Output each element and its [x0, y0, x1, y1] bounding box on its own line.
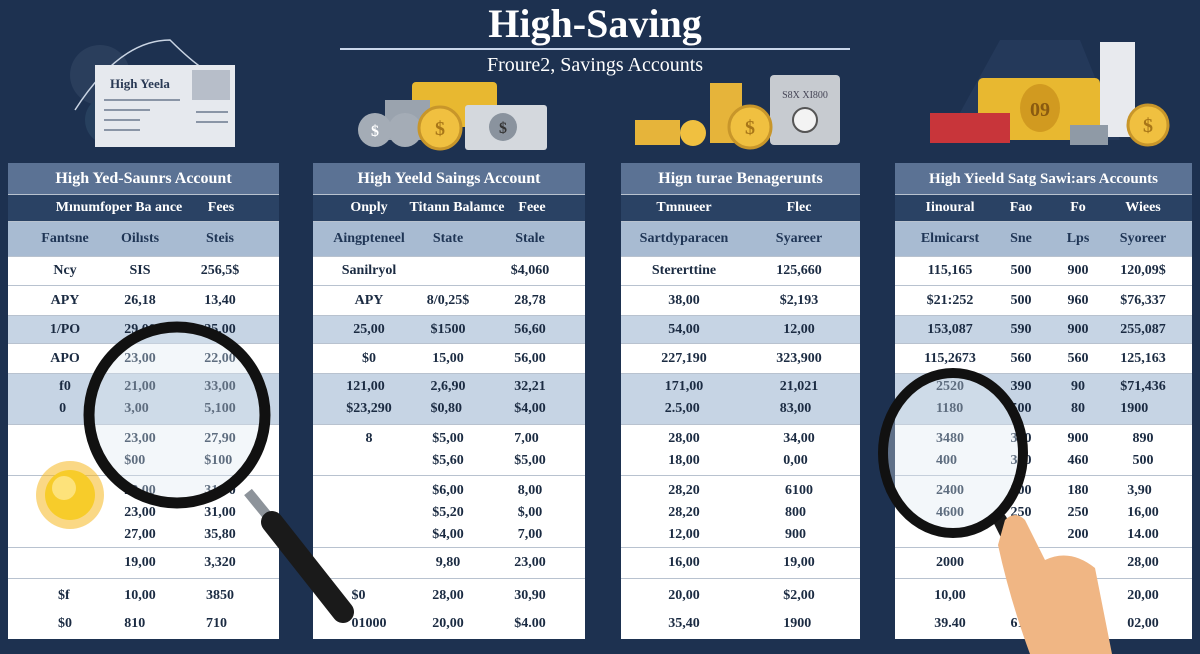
- panel: table 4: 80: [1071, 401, 1085, 416]
- panel: table 3: $2,00: [783, 588, 815, 603]
- panel: table 2: 7,00: [514, 431, 539, 446]
- panel: table 1: Fees: [208, 200, 234, 215]
- panel: table 3: 1900: [783, 616, 811, 631]
- panel: table 4: 2520: [936, 379, 964, 394]
- panel: table 4: 960: [1068, 293, 1088, 308]
- icon: gold bill and document: $: [1143, 115, 1153, 137]
- panel: table 2: $0,80: [430, 401, 462, 416]
- icon: newspaper: High Yeela: [110, 76, 170, 91]
- panel: table 2: $4,00: [514, 401, 546, 416]
- panel: table 4: 500: [1010, 263, 1032, 278]
- panel: table 3: 28,00: [668, 431, 700, 446]
- panel: table 2: $,00: [518, 505, 542, 520]
- panel: table 4: 250: [1010, 505, 1032, 520]
- panel: table 2: $0: [352, 588, 366, 603]
- panel: table 2: 56,00: [514, 351, 546, 366]
- panel: table 4: $71,436: [1120, 379, 1166, 394]
- panel: table 4: [895, 163, 1192, 639]
- panel: table 2: Titann Balamce: [409, 200, 505, 215]
- panel: table 3: 28,20: [668, 505, 700, 520]
- panel: table 2: [313, 163, 585, 639]
- panel: table 1: $00: [124, 453, 145, 468]
- panel: table 3: 2.5,00: [665, 401, 700, 416]
- panel: table 2: 2,6,90: [430, 379, 466, 394]
- panel: table 2: APY: [355, 293, 383, 308]
- title: [340, 1, 850, 76]
- panel: table 1: APY: [51, 293, 79, 308]
- panel: table 3: 83,00: [780, 401, 811, 416]
- icon: coin stacks and safe: [635, 75, 840, 148]
- panel: table 2: 30,90: [514, 588, 546, 603]
- panel: table 1: 29,00: [124, 322, 156, 337]
- panel: table 1: 0: [59, 401, 66, 416]
- hand: [998, 515, 1112, 654]
- panel: table 4: Lps: [1067, 231, 1089, 246]
- panel: table 2: State: [433, 231, 463, 246]
- panel: table 1: 3,00: [124, 401, 149, 416]
- panel: table 4: 200: [1068, 527, 1088, 542]
- panel: table 4: 390: [1010, 379, 1032, 394]
- panel: table 1: [8, 163, 279, 639]
- panel: table 2: 121,00: [346, 379, 385, 394]
- panel: table 2: 25,00: [353, 322, 385, 337]
- panel: table 2: $0: [362, 351, 376, 366]
- panel: table 1: Fantsne: [41, 231, 89, 246]
- panel: table 2: Sanilryol: [342, 263, 396, 278]
- panel: table 4: 28,00: [1127, 555, 1159, 570]
- panel: table 4: 400: [936, 453, 957, 468]
- panel: table 4: Iinoural: [925, 200, 975, 215]
- panel: table 4: 153,087: [927, 322, 973, 337]
- panel: table 4: 10,00: [934, 588, 966, 603]
- panel: table 1: 22,00: [204, 351, 236, 366]
- panel: table 4: $21:252: [927, 293, 973, 308]
- heading: High-Saving: [488, 1, 702, 46]
- panel: table 4: 900: [1068, 263, 1088, 278]
- panel: table 1: 27,90: [204, 431, 236, 446]
- panel: table 3: 21,021: [780, 379, 818, 394]
- panel: table 3: 323,900: [776, 351, 822, 366]
- panel: table 1: 27,00: [124, 527, 156, 542]
- panel: table 3: Stererttine: [652, 263, 716, 278]
- panel: table 2: $5,20: [432, 505, 464, 520]
- panel: table 2: $4,00: [432, 527, 464, 542]
- panel: table 3: 34,00: [783, 431, 815, 446]
- panel: table 2: 8,00: [518, 483, 542, 498]
- table 4 title: [895, 163, 1192, 195]
- panel: table 2: $23,290: [346, 401, 392, 416]
- panel: table 4: 300: [1010, 483, 1032, 498]
- panel: table 3: 0,00: [783, 453, 808, 468]
- panel: table 1: 23,00: [124, 431, 156, 446]
- panel: table 4: 460: [1068, 453, 1088, 468]
- panel: table 4: 590: [1010, 322, 1032, 337]
- panel: table 1: 1/PO: [50, 322, 80, 337]
- icon: newspaper: [70, 40, 235, 147]
- panel: table 4: Syoreer: [1120, 231, 1166, 246]
- panel: table 4: 3480: [936, 431, 964, 446]
- table 1 title: High Yed-Saunrs Account: [55, 170, 232, 187]
- panel: table 3: $2,193: [780, 293, 818, 308]
- panel: table 4: 125,163: [1120, 351, 1166, 366]
- panel: table 3: 125,660: [776, 263, 822, 278]
- panel: table 2: $1500: [430, 322, 466, 337]
- panel: table 3: 171,00: [665, 379, 703, 394]
- panel: table 3: 800: [785, 505, 806, 520]
- panel: table 2: $4,060: [511, 263, 549, 278]
- panel: table 4: 1180: [936, 401, 963, 416]
- panel: table 1: Mınumfoper Ba ance: [56, 200, 182, 215]
- panel: table 4: 20,00: [1127, 588, 1159, 603]
- panel: table 4: 120,09$: [1120, 263, 1166, 278]
- panel: table 1: 31,00: [204, 505, 236, 520]
- panel: table 2: $5,00: [514, 453, 546, 468]
- panel: table 4: 500: [1010, 293, 1032, 308]
- panel: table 3: 227,190: [661, 351, 707, 366]
- panel: table 1: $f: [58, 588, 70, 603]
- panel: table 2: Aingpteneel: [333, 231, 405, 246]
- panel: table 4: 500: [1132, 453, 1154, 468]
- panel: table 4: Sne: [1010, 231, 1032, 246]
- icon: sun: [36, 461, 104, 529]
- panel: table 3: Tmnueer: [656, 200, 712, 215]
- icon: coin stacks and safe: S8X XI800: [782, 90, 828, 101]
- panel: table 1: 710: [206, 616, 227, 631]
- panel: table 4: 1900: [1120, 401, 1148, 416]
- panel: table 2: 9,80: [436, 555, 460, 570]
- icon: magnifier right with hand: [883, 373, 1112, 654]
- panel: table 2: 32,21: [514, 379, 546, 394]
- panel: table 3: 28,20: [668, 483, 700, 498]
- panel: table 3: Sartdyparacen: [640, 231, 728, 246]
- panel: table 1: SIS: [129, 263, 151, 278]
- panel: table 1: 23,00: [124, 483, 156, 498]
- panel: table 3: 16,00: [668, 555, 700, 570]
- panel: table 4: 02,00: [1127, 616, 1159, 631]
- panel: table 1: 13,40: [204, 293, 236, 308]
- panel: table 1: 31,00: [204, 483, 236, 498]
- table 2 title: High Yeeld Saings Account: [358, 170, 540, 187]
- panel: table 4: 90: [1071, 379, 1085, 394]
- panel: table 1: $100: [204, 453, 232, 468]
- icons row: [70, 39, 1170, 150]
- icon: coin stacks and safe: $: [745, 117, 755, 139]
- icon: cash and coins: $: [499, 120, 507, 137]
- panel: table 1: 5,100: [204, 401, 236, 416]
- panel: table 3: Syareer: [776, 231, 822, 246]
- panel: table 1: 25,00: [204, 322, 236, 337]
- panel: table 4: 900: [1068, 322, 1088, 337]
- panel: table 2: 20,00: [432, 616, 464, 631]
- panel: table 4: 4600: [936, 505, 964, 520]
- panel: table 2: 28,00: [432, 588, 464, 603]
- panel: table 4: 255,087: [1120, 322, 1166, 337]
- panel: table 1: 21,00: [124, 379, 156, 394]
- panel: table 1: Oilısts: [121, 231, 159, 246]
- panel: table 3: 12,00: [783, 322, 815, 337]
- panel: table 2: 8/0,25$: [427, 293, 469, 308]
- table 3 title: Hign turae Benagerunts: [658, 170, 823, 187]
- icon: gold bill and document: 09: [1030, 99, 1050, 121]
- panel: table 2: 56,60: [514, 322, 546, 337]
- panel: table 1: 19,00: [124, 555, 156, 570]
- panel: table 1: 3850: [206, 588, 234, 603]
- subtitle: Frourе2, Savings Accounts: [487, 54, 703, 76]
- panel: table 1: f0: [59, 379, 71, 394]
- panel: table 4: 500: [1010, 401, 1032, 416]
- icon: cash and coins: $: [371, 123, 379, 140]
- panel: table 1: Steis: [206, 231, 234, 246]
- icon: cash and coins: $: [435, 118, 445, 140]
- panel: table 2: Feee: [518, 200, 546, 215]
- panel: table 2: 8: [366, 431, 372, 446]
- panel: table 2: 7,00: [518, 527, 542, 542]
- table 3 title: [621, 163, 860, 195]
- panel: table 1: 3,320: [204, 555, 236, 570]
- panel: table 1: 23,00: [124, 505, 156, 520]
- panel: table 1: 256,5$: [201, 263, 239, 278]
- panel: table 4: 3,90: [1127, 483, 1152, 498]
- panel: table 2: $5,60: [432, 453, 464, 468]
- panel: table 1: 23,00: [124, 351, 156, 366]
- subtitle: [340, 48, 850, 76]
- panel: table 1: 10,00: [124, 588, 156, 603]
- panel: table 1: $0: [58, 616, 72, 631]
- panel: table 2: Stale: [515, 231, 545, 246]
- panel: table 4: 2400: [936, 483, 964, 498]
- panel: table 4: 560: [1068, 351, 1088, 366]
- panel: table 4: 560: [1010, 351, 1032, 366]
- panel: table 2: 01000: [352, 616, 386, 631]
- panel: table 4: 2000: [936, 555, 964, 570]
- panel: table 2: $5,00: [432, 431, 464, 446]
- panel: table 1: Ncy: [53, 263, 77, 278]
- panel: table 2: $6,00: [432, 483, 464, 498]
- panel: table 4: 610: [1010, 616, 1032, 631]
- panel: table 4: 115,165: [928, 263, 972, 278]
- panel: table 1: APO: [50, 351, 80, 366]
- panel: table 1: 35,80: [204, 527, 236, 542]
- panel: table 2: 28,78: [514, 293, 546, 308]
- panel: table 4: 115,2673: [924, 351, 976, 366]
- panel: table 4: 180: [1068, 483, 1088, 498]
- panel: table 3: 12,00: [668, 527, 700, 542]
- icon: cash and coins: [358, 82, 547, 150]
- panel: table 3: 900: [785, 527, 806, 542]
- panel: table 1: 810: [124, 616, 145, 631]
- panel: table 4: Elmicarst: [921, 231, 979, 246]
- panel: table 4: 900: [1068, 431, 1088, 446]
- panel: table 4: 16,00: [1127, 505, 1159, 520]
- panel: table 3: 20,00: [668, 588, 700, 603]
- panel: table 4: $76,337: [1120, 293, 1166, 308]
- panel: table 3: 6100: [785, 483, 813, 498]
- panel: table 4: Wiees: [1125, 200, 1161, 215]
- table 1 title: [8, 163, 279, 195]
- panel: table 4: Fo: [1070, 200, 1086, 215]
- panel: table 1: 33,00: [204, 379, 236, 394]
- panel: table 4: 39.40: [934, 616, 966, 631]
- table 2 title: [313, 163, 585, 195]
- panel: table 3: Flec: [787, 200, 811, 215]
- panel: table 3: 35,40: [668, 616, 700, 631]
- icon: gold bill and document: [930, 40, 1168, 145]
- panel: table 2: 15,00: [432, 351, 464, 366]
- panel: table 3: [621, 163, 860, 639]
- panel: table 4: 250: [1068, 505, 1088, 520]
- panel: table 4: 390: [1010, 453, 1032, 468]
- panel: table 3: 54,00: [668, 322, 700, 337]
- table 4 title: High Yieeld Satg Sawi:ars Accounts: [929, 171, 1158, 187]
- panel: table 3: 19,00: [783, 555, 815, 570]
- panel: table 2: Onply: [350, 200, 388, 215]
- panel: table 1: 26,18: [124, 293, 156, 308]
- panel: table 4: 390: [1010, 431, 1032, 446]
- panel: table 2: 23,00: [514, 555, 546, 570]
- panel: table 3: 18,00: [668, 453, 700, 468]
- panel: table 4: Fao: [1010, 200, 1032, 215]
- panel: table 3: 38,00: [668, 293, 700, 308]
- panel: table 2: $4.00: [514, 616, 546, 631]
- panel: table 4: 890: [1132, 431, 1154, 446]
- panel: table 4: 14.00: [1127, 527, 1159, 542]
- icon: magnifier left: [89, 327, 343, 612]
